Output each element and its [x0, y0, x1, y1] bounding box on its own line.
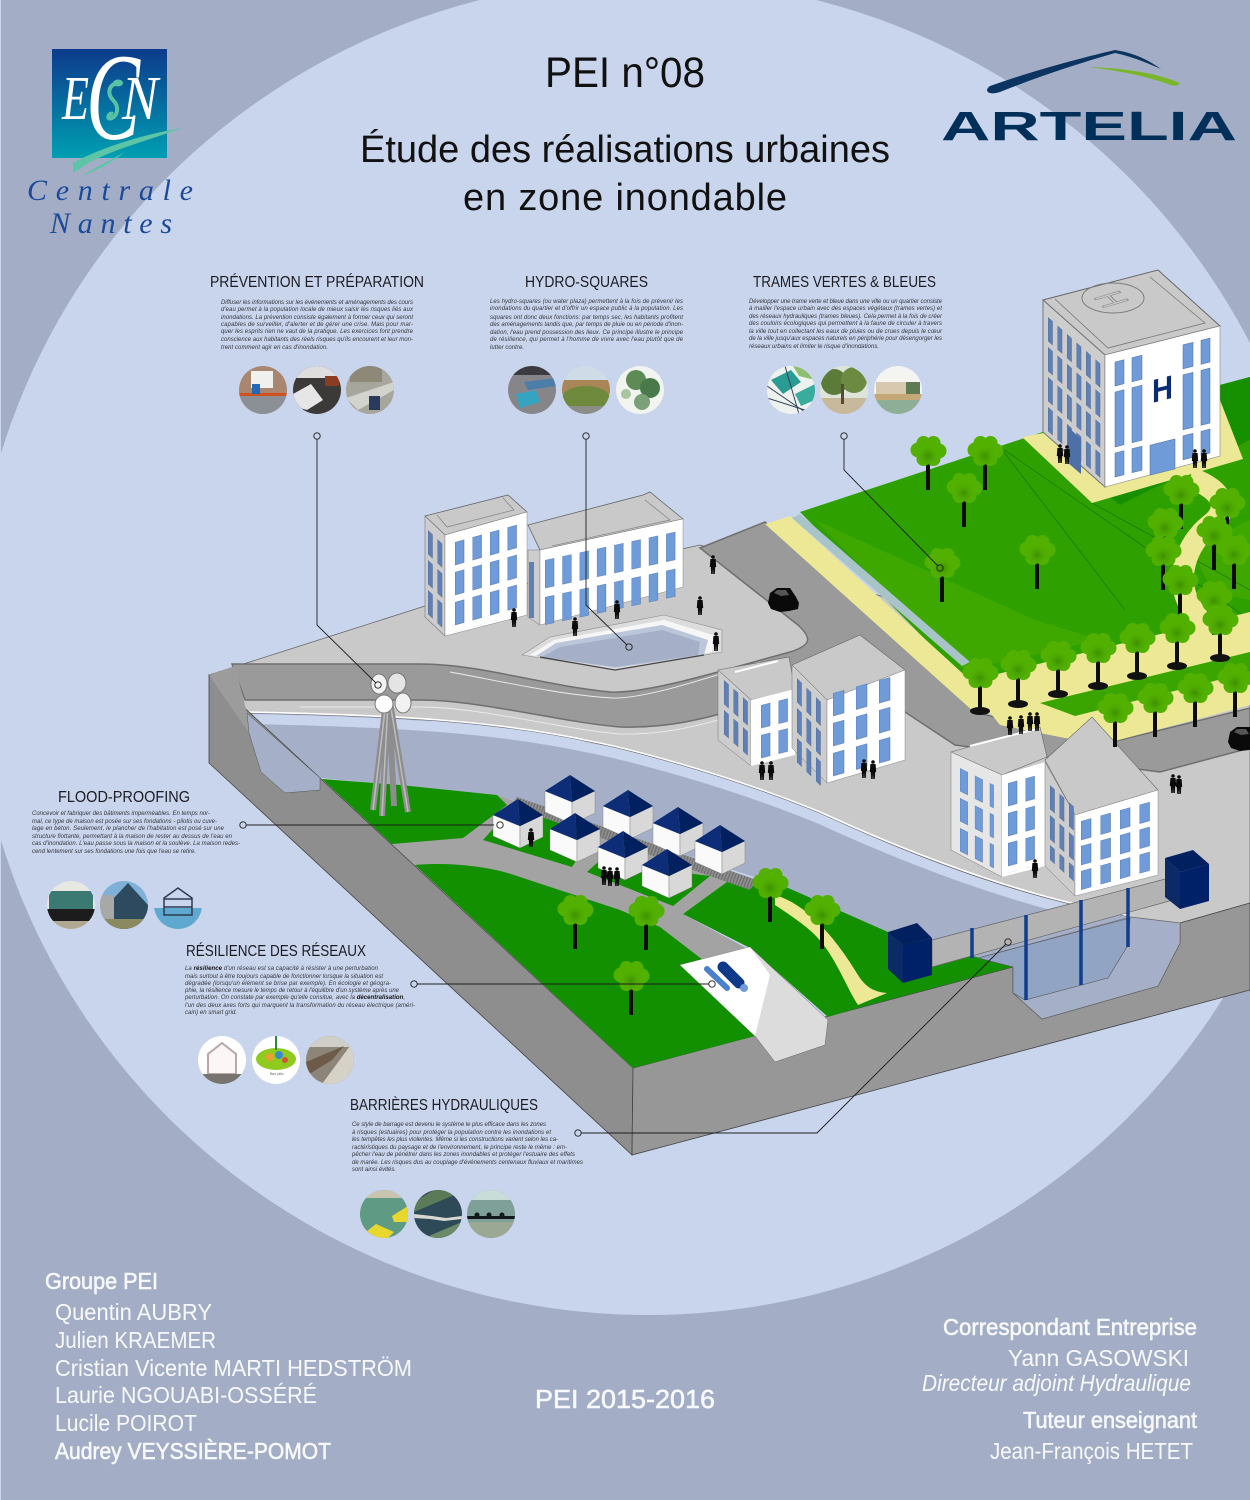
- text block: hydro-squares: inondations du quartier et d'offrir un espace public à la population. Les: [490, 306, 683, 312]
- text block: hydro-squares: Les hydro-squares (ou water plaza) permettent à la fois de prévenir les: [490, 299, 683, 305]
- trees: [558, 436, 1250, 1015]
- company contact and tutor: Jean-François HETET: [990, 1438, 1193, 1464]
- logo: Centrale Nantes: [27, 29, 193, 240]
- winding yellow path: [775, 895, 887, 1005]
- text block: flood-proofing: cas d'inondation. L'eau passe sous la maison et la soulève. La maison redes-: [32, 841, 240, 847]
- text block: hydro-squares: squares ont donc deux fonctions: par temps sec, les habitants profitent: [490, 315, 683, 321]
- scene: right face of the block: [632, 903, 1250, 1155]
- team list: Julien KRAEMER: [55, 1327, 216, 1353]
- title: Étude des réalisations urbaines: [360, 128, 890, 171]
- title: PEI n°08: [545, 49, 705, 97]
- text block: trames vertes et bleues: à mailler l'espace urbain avec des espaces végétaux (trames vertes) et: [749, 306, 942, 312]
- text block: trames vertes et bleues: des couloirs écologiques qui permettent à la faune de circuler à travers: [749, 321, 942, 327]
- building: upper block, right wing: [528, 492, 683, 625]
- text block: trames vertes et bleues: TRAMES VERTES & BLEUES: [753, 274, 936, 291]
- river bank highlight: [247, 719, 1067, 909]
- scene: left face of the block: [209, 675, 633, 1155]
- text block: résilience des réseaux: perturbation. On constate par exemple qu'elle consitue, avec la décentralisation,: [184, 995, 405, 1001]
- text block: flood-proofing: mal, ce type de maison est posée sur ses fondations - pilotis ou cuve-: [32, 819, 217, 825]
- text block: hydro-squares: HYDRO-SQUARES: [525, 274, 648, 291]
- text block: prévention et préparation: quer les esprits rien ne vaut de la pratique. Les exercices font prendre: [221, 329, 414, 335]
- team list: Lucile POIROT: [55, 1410, 197, 1436]
- text block: trames vertes et bleues: de la ville jusqu'aux espaces naturels en périphérie pour désengorger les: [749, 336, 942, 342]
- callout: flood-proofing: [240, 822, 503, 828]
- photos: flood-proofing: [47, 881, 202, 929]
- text block: barrières hydrauliques: les tempêtes les plus violentes. Même si les constructions varient selon les ca-: [352, 1137, 558, 1143]
- logo: Artelia: [941, 50, 1237, 149]
- cars: [768, 588, 1250, 751]
- logo: Artelia: ARTELIA: [941, 103, 1237, 149]
- siren mast: [371, 673, 411, 816]
- floating houses: [493, 775, 745, 898]
- team list: [45, 1268, 412, 1464]
- text block: barrières hydrauliques: à risques (estuaires) pour protéger la population contre les inondations et: [352, 1130, 551, 1136]
- text block: prévention et préparation: capables de surveiller, d'alerter et de gérer une crise. Mais pour mar-: [221, 322, 413, 328]
- text block: prévention et préparation: inondations. La prévention consiste également à former ceux qui seront: [221, 315, 413, 321]
- text block: flood-proofing: lage en béton. Seulement, le plancher de l'habitation est posé sur une: [32, 826, 225, 832]
- callout: hydro-squares: [583, 433, 632, 650]
- barrier pillars: [972, 888, 1128, 1000]
- company contact and tutor: Tuteur enseignant: [1023, 1407, 1198, 1433]
- text block: trames vertes et bleues: Développer une trame verte et bleue dans une ville ou un quartier consiste: [749, 299, 943, 305]
- text block: résilience des réseaux: phie, la résilience mesure le temps de retour à l'équilibre d'un système après une: [184, 988, 400, 994]
- scene: road: [232, 522, 1250, 772]
- road kerb lines: [300, 662, 760, 734]
- logo: Centrale Nantes: Centrale: [27, 174, 193, 207]
- text block: résilience des réseaux: [184, 941, 415, 1016]
- text block: flood-proofing: FLOOD-PROOFING: [58, 789, 190, 806]
- river cut in the right face: [978, 917, 1180, 1019]
- tree-lined avenue: [965, 612, 1250, 745]
- text block: trames vertes et bleues: réseaux urbains et limiter le risque d'inondations.: [749, 344, 879, 350]
- logo: Centrale Nantes: C: [86, 29, 141, 166]
- logo: Centrale Nantes: E: [61, 65, 89, 133]
- text block: résilience des réseaux: cain) en smart grid.: [185, 1010, 237, 1016]
- scene: plaza: [209, 545, 1250, 923]
- text block: prévention et préparation: trent comment agir en cas d'inondation.: [221, 345, 328, 351]
- text block: résilience des réseaux: RÉSILIENCE DES RÉSEAUX: [186, 941, 366, 960]
- text block: résilience des réseaux: dégradée (lorsqu'un élément se brise par exemple). En écologie et géogra-: [185, 981, 391, 987]
- callout: prévention: [314, 433, 381, 688]
- blue-grey water corridor: [792, 514, 970, 666]
- helipad: H: [1085, 287, 1137, 312]
- team list: Cristian Vicente MARTI HEDSTRÖM: [55, 1355, 412, 1381]
- logo: Centrale Nantes: Nantes: [49, 207, 172, 240]
- callout: résilience: [411, 981, 715, 987]
- text block: flood-proofing: Concevoir et fabriquer des bâtiments imperméables. En temps nor-: [32, 811, 210, 817]
- text block: barrières hydrauliques: de marée. Les risques dus au couplage d'événements centenaux fluviaux et maritimes: [352, 1160, 583, 1166]
- logo: Centrale Nantes: N: [121, 65, 161, 133]
- text block: résilience des réseaux: La résilience d'un réseau est sa capacité à résister à une perturbation: [185, 966, 379, 972]
- hydro-square basin: [522, 615, 722, 670]
- photos: résilience: flux pilo: [270, 1071, 284, 1076]
- helipad: [1082, 283, 1144, 313]
- company contact and tutor: [922, 1314, 1198, 1464]
- pumping outlet ramp: [680, 947, 828, 1062]
- text block: hydro-squares: des aménagements tandis que, par temps de pluie ou en période d'inon-: [490, 322, 683, 328]
- footbridge: [510, 797, 757, 890]
- people silhouettes: [511, 444, 1207, 886]
- text block: hydro-squares: de résilience, qui permet à l'homme de vivre avec l'eau plutôt que de: [490, 337, 684, 343]
- callout: trames: [841, 433, 943, 571]
- scene: lower bank paths: [322, 779, 750, 1068]
- text block: barrières hydrauliques: pêcher l'eau de pénétrer dans les zones inondables et protéger l'estuaire des effets: [351, 1152, 575, 1158]
- team list: Audrey VEYSSIÈRE-POMOT: [55, 1438, 331, 1464]
- text block: résilience des réseaux: mais surtout à être toujours capable de fonctionner lorsque la situation est: [185, 974, 383, 980]
- building: central block, right wing: [792, 635, 905, 791]
- bank edge line: [247, 712, 1130, 916]
- flood barrier wall: [932, 877, 1173, 967]
- text block: résilience des réseaux: l'un des deux axes forts qui marquent la transformation du réseau électrique (améri-: [185, 1003, 415, 1009]
- text block: prévention et préparation: Diffuser les informations sur les événements et aménagements des cours: [221, 300, 413, 306]
- photos: hydro-squares: [508, 366, 664, 414]
- building: upper block, left wing: [425, 495, 527, 637]
- company contact and tutor: Correspondant Entreprise: [943, 1314, 1197, 1340]
- yellow hospital forecourt and path: [1022, 400, 1243, 645]
- text block: hydro-squares: dation, l'eau prend possession des lieux. Ce principe illustre le principe: [490, 330, 684, 336]
- title: [360, 49, 890, 219]
- building: lower block, left wing: [951, 727, 1047, 877]
- building: lower block, right wing: [1045, 717, 1158, 896]
- photos: résilience: [198, 1036, 354, 1084]
- scene: green park: [800, 377, 1250, 680]
- text block: prévention et préparation: conscience aux habitants des réels risques qu'ils encourent et leur mon-: [221, 337, 413, 343]
- text block: barrières hydrauliques: ractéristiques du paysage et de l'environnement, le principe reste le même : em-: [352, 1145, 567, 1151]
- title: en zone inondable: [463, 177, 787, 219]
- barrier water: [978, 918, 1130, 1000]
- text block: flood-proofing: structure flottante, permettant à la maison de rester au dessus de l'eau en: [32, 834, 233, 840]
- photos: trames: [767, 366, 922, 414]
- lower bank lawns: [322, 779, 1012, 1068]
- yellow promenade: [765, 516, 1005, 713]
- text block: prévention et préparation: d'eau permet à la population locale de mieux saisir les risques liés aux: [221, 307, 414, 313]
- right barrier cube: [1165, 850, 1209, 909]
- team list: Laurie NGOUABI-OSSÉRÉ: [55, 1382, 317, 1408]
- photos: prévention: [239, 366, 394, 414]
- river cross-section: [209, 666, 320, 793]
- text block: prévention et préparation: [210, 272, 424, 351]
- photos: barrières: [360, 1190, 515, 1238]
- left barrier cube: [888, 923, 932, 983]
- company contact and tutor: Directeur adjoint Hydraulique: [922, 1370, 1191, 1396]
- text block: trames vertes et bleues: la ville tout en collectant les eaux de pluies ou de crues depuis le cœur: [749, 329, 943, 335]
- building: central block, left wing: [718, 657, 796, 766]
- project year: PEI 2015-2016: [535, 1384, 715, 1414]
- callout: barrières: [575, 939, 1011, 1136]
- hospital building: H: [1152, 369, 1173, 411]
- text block: trames vertes et bleues: des réseaux hydrauliques (trames bleues). Cela permet à la fois de créer: [749, 314, 943, 320]
- team list: Groupe PEI: [45, 1268, 158, 1294]
- company contact and tutor: Yann GASOWSKI: [1008, 1345, 1189, 1371]
- text block: prévention et préparation: PRÉVENTION ET PRÉPARATION: [210, 272, 424, 291]
- text block: hydro-squares: [490, 274, 684, 351]
- text block: hydro-squares: lutter contre.: [490, 345, 524, 351]
- team list: Quentin AUBRY: [55, 1299, 212, 1325]
- hospital building: [1043, 270, 1220, 488]
- text block: barrières hydrauliques: sont ainsi évités.: [352, 1167, 396, 1173]
- text block: flood-proofing: cend lentement sur ses fondations une fois que l'eau se retire.: [32, 849, 196, 855]
- text block: flood-proofing: [32, 789, 240, 855]
- text block: trames vertes et bleues: [749, 274, 943, 350]
- scene: river bed: [247, 713, 1180, 967]
- text block: barrières hydrauliques: BARRIÈRES HYDRAULIQUES: [350, 1095, 538, 1114]
- text block: barrières hydrauliques: Ce style de barrage est devenu le système le plus efficace dans les zones: [352, 1122, 546, 1128]
- text block: barrières hydrauliques: [350, 1095, 583, 1173]
